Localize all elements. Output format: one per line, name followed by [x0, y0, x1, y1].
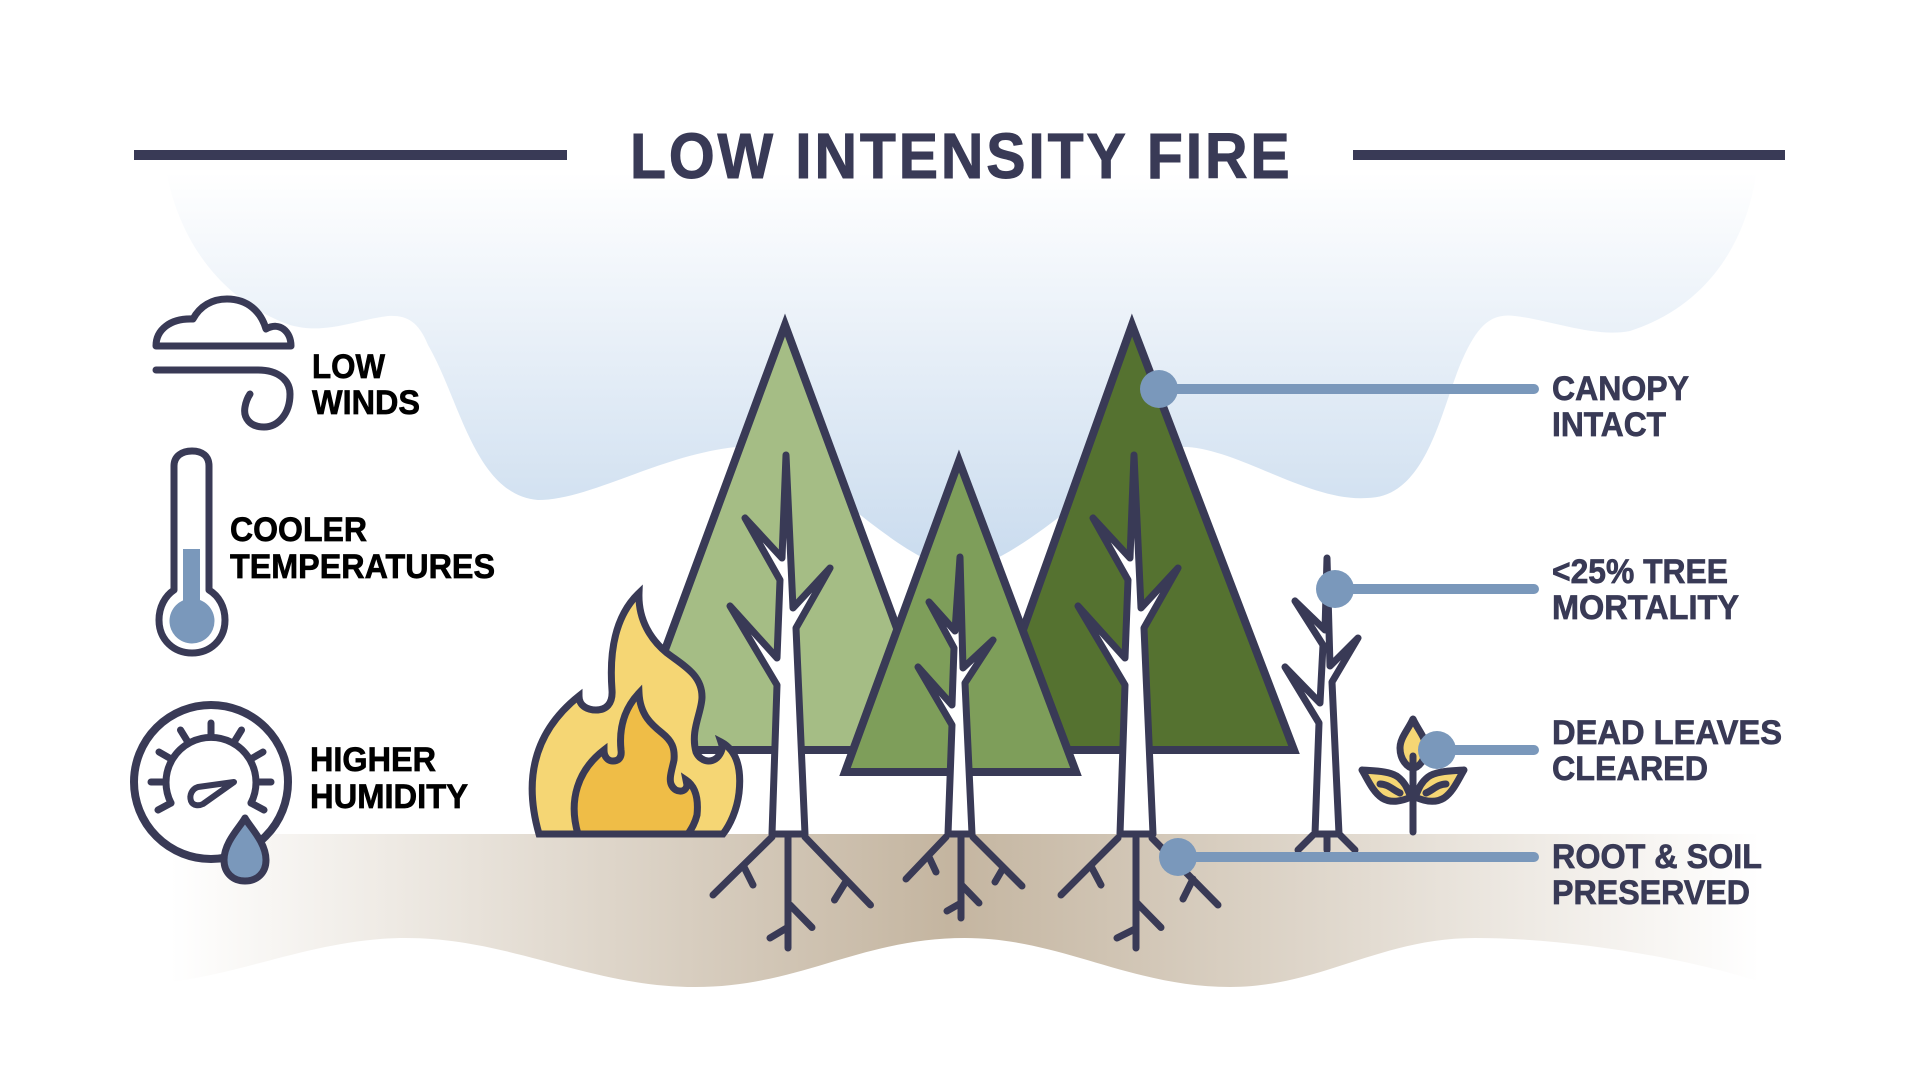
- label: low winds: LOW: [312, 348, 386, 386]
- callout: canopy intact: CANOPY: [1552, 370, 1689, 408]
- label: cooler temperatures: TEMPERATURES: [230, 548, 495, 586]
- small tree trunk: [1285, 558, 1358, 850]
- callout: dead leaves cleared: [1418, 714, 1782, 788]
- callout: tree mortality: [1316, 553, 1739, 627]
- tree 1 light green: [628, 325, 942, 750]
- label: low winds: [312, 348, 420, 422]
- icon: humidity gauge: [134, 705, 288, 881]
- callout: canopy intact: [1140, 370, 1689, 444]
- callout: dead leaves cleared: CLEARED: [1552, 750, 1708, 788]
- flame: [532, 593, 740, 834]
- label: higher humidity: [310, 741, 468, 816]
- callout: tree mortality: MORTALITY: [1552, 589, 1739, 627]
- soil band: [170, 834, 1760, 987]
- tree 2 mid green: [845, 461, 1076, 772]
- callout: canopy intact: INTACT: [1552, 406, 1666, 444]
- title with rules: [134, 121, 1785, 193]
- sprout with yellow leaves: [1362, 719, 1464, 832]
- tree 3 dark green: [980, 325, 1294, 750]
- tree 2 trunk and roots: [906, 557, 1022, 918]
- icon: thermometer: [159, 451, 225, 653]
- icon: cloud and wind: [156, 299, 291, 427]
- label: cooler temperatures: COOLER: [230, 511, 367, 549]
- label: low winds: WINDS: [312, 384, 420, 422]
- label: higher humidity: HUMIDITY: [310, 778, 468, 816]
- label: cooler temperatures: [230, 511, 495, 586]
- tree 3 trunk and roots: [1061, 455, 1218, 948]
- title with rules: LOW INTENSITY FIRE: [630, 121, 1290, 193]
- callout: dead leaves cleared: DEAD LEAVES: [1552, 714, 1782, 752]
- tree 1 trunk and roots: [713, 455, 870, 948]
- callout: tree mortality: <25% TREE: [1552, 553, 1728, 591]
- background sky haze: [167, 175, 1756, 572]
- callout: root and soil preserved: ROOT & SOIL: [1552, 838, 1762, 876]
- callout: root and soil preserved: [1159, 838, 1762, 912]
- callout: root and soil preserved: PRESERVED: [1552, 874, 1750, 912]
- label: higher humidity: HIGHER: [310, 741, 436, 779]
